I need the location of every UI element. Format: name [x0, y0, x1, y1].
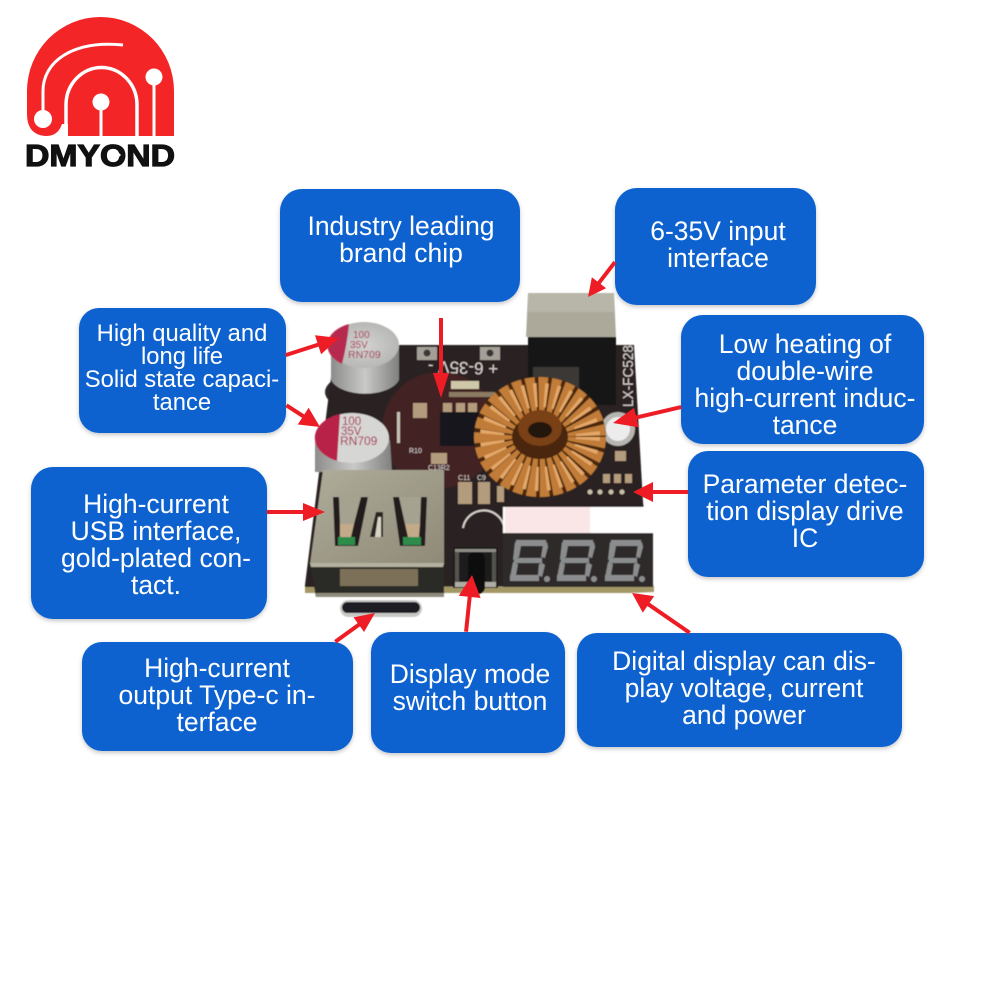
callout: drive IC — [688, 451, 924, 577]
circuit board — [305, 345, 654, 593]
callout: usb interface: USB interface, — [71, 516, 241, 546]
capacitor 1 — [327, 322, 399, 394]
callout: type-c output: terface — [176, 707, 258, 737]
arrow: drive ic — [633, 482, 688, 502]
callout: brand chip: Industry leading — [307, 211, 495, 241]
ic chip — [440, 412, 490, 446]
capacitor 2: 100 — [342, 416, 361, 428]
callout: usb interface: High-current — [83, 489, 230, 519]
callout: drive IC: IC — [792, 523, 818, 553]
callout: inductance: high-current induc- — [695, 383, 915, 413]
arrow: input — [581, 257, 622, 303]
callout: usb interface: gold-plated con- — [61, 543, 251, 573]
digit 1 — [510, 540, 550, 582]
callout: drive IC: Parameter detec- — [703, 469, 907, 499]
callout: input interface: interface — [667, 243, 769, 273]
digit 3 — [605, 540, 645, 582]
silkscreen labels: C9 — [477, 475, 486, 482]
input connector — [526, 293, 616, 405]
callout: type-c output: output Type-c in- — [119, 680, 315, 710]
logo: DMYOND — [25, 17, 175, 173]
callout: brand chip: brand chip — [339, 238, 463, 268]
capacitor 1: 35V — [350, 340, 368, 351]
callout: usb interface — [31, 467, 267, 619]
callout: solid state capacitance: tance — [153, 389, 211, 416]
callout: mode button: switch button — [393, 686, 547, 716]
callout: usb interface: tact. — [131, 570, 181, 600]
callout: solid state capacitance: long life — [141, 343, 223, 370]
callout: type-c output — [82, 642, 353, 751]
led display — [503, 533, 653, 587]
product photo: PCB module — [305, 293, 654, 617]
arrow: inductor — [611, 397, 683, 433]
callout: digital display: and power — [682, 700, 806, 730]
tact switch — [453, 510, 504, 594]
callout: type-c output: High-current — [144, 653, 291, 683]
arrow: type-c — [330, 606, 380, 649]
callout: inductance: tance — [773, 410, 837, 440]
pads — [417, 347, 500, 360]
callout: inductance — [681, 315, 924, 444]
arrow: button — [455, 574, 483, 633]
callout: digital display — [577, 633, 902, 747]
callout: solid state capacitance — [79, 308, 286, 433]
capacitor 1: RN709 — [348, 349, 381, 361]
model marking: LX-FC528 — [620, 345, 637, 407]
maroon tint — [382, 372, 498, 488]
digit 2 — [557, 540, 597, 582]
arrow: capacitor 2 — [281, 397, 325, 435]
callout: solid state capacitance: High quality and — [97, 320, 267, 347]
capacitor base shadow — [325, 372, 409, 412]
silkscreen labels: R10 — [409, 448, 422, 455]
callout: input interface: 6-35V input — [650, 216, 786, 246]
capacitor 2: 35V — [341, 426, 362, 438]
callout: input interface — [615, 188, 816, 305]
mounting hole — [601, 412, 635, 446]
silkscreen labels: C13R2 — [428, 465, 450, 472]
arrow: display — [626, 585, 695, 641]
silkscreen labels: C11 — [458, 475, 470, 482]
silkscreen labels — [409, 448, 486, 482]
arrow: capacitor 1 — [283, 328, 342, 365]
callout: drive IC: tion display drive — [706, 496, 904, 526]
inductor — [474, 377, 606, 497]
arrow: usb — [267, 503, 325, 521]
arrow: chip — [433, 318, 449, 398]
callout: digital display: Digital display can dis- — [612, 646, 876, 676]
white mask with pink tint — [503, 507, 653, 533]
board edge — [305, 586, 654, 593]
callout: brand chip — [280, 189, 520, 302]
capacitor 2: RN709 — [340, 434, 378, 448]
capacitor 1: 100 — [353, 330, 370, 341]
usb port — [310, 470, 444, 597]
callout: mode button: Display mode — [390, 659, 550, 689]
capacitor 2 — [315, 413, 392, 472]
callout: mode button — [371, 632, 565, 753]
board silkscreen: + 6-35V - — [428, 357, 499, 378]
smd components — [397, 381, 632, 504]
pin row — [588, 490, 624, 494]
usb-c port — [340, 600, 422, 617]
callout: digital display: play voltage, current — [625, 673, 864, 703]
callout: solid state capacitance: Solid state capaci- — [85, 366, 279, 393]
callout: inductance: Low heating of — [719, 329, 892, 359]
callout: inductance: double-wire — [736, 356, 874, 386]
logo: DMYOND: DMYOND — [25, 138, 175, 173]
